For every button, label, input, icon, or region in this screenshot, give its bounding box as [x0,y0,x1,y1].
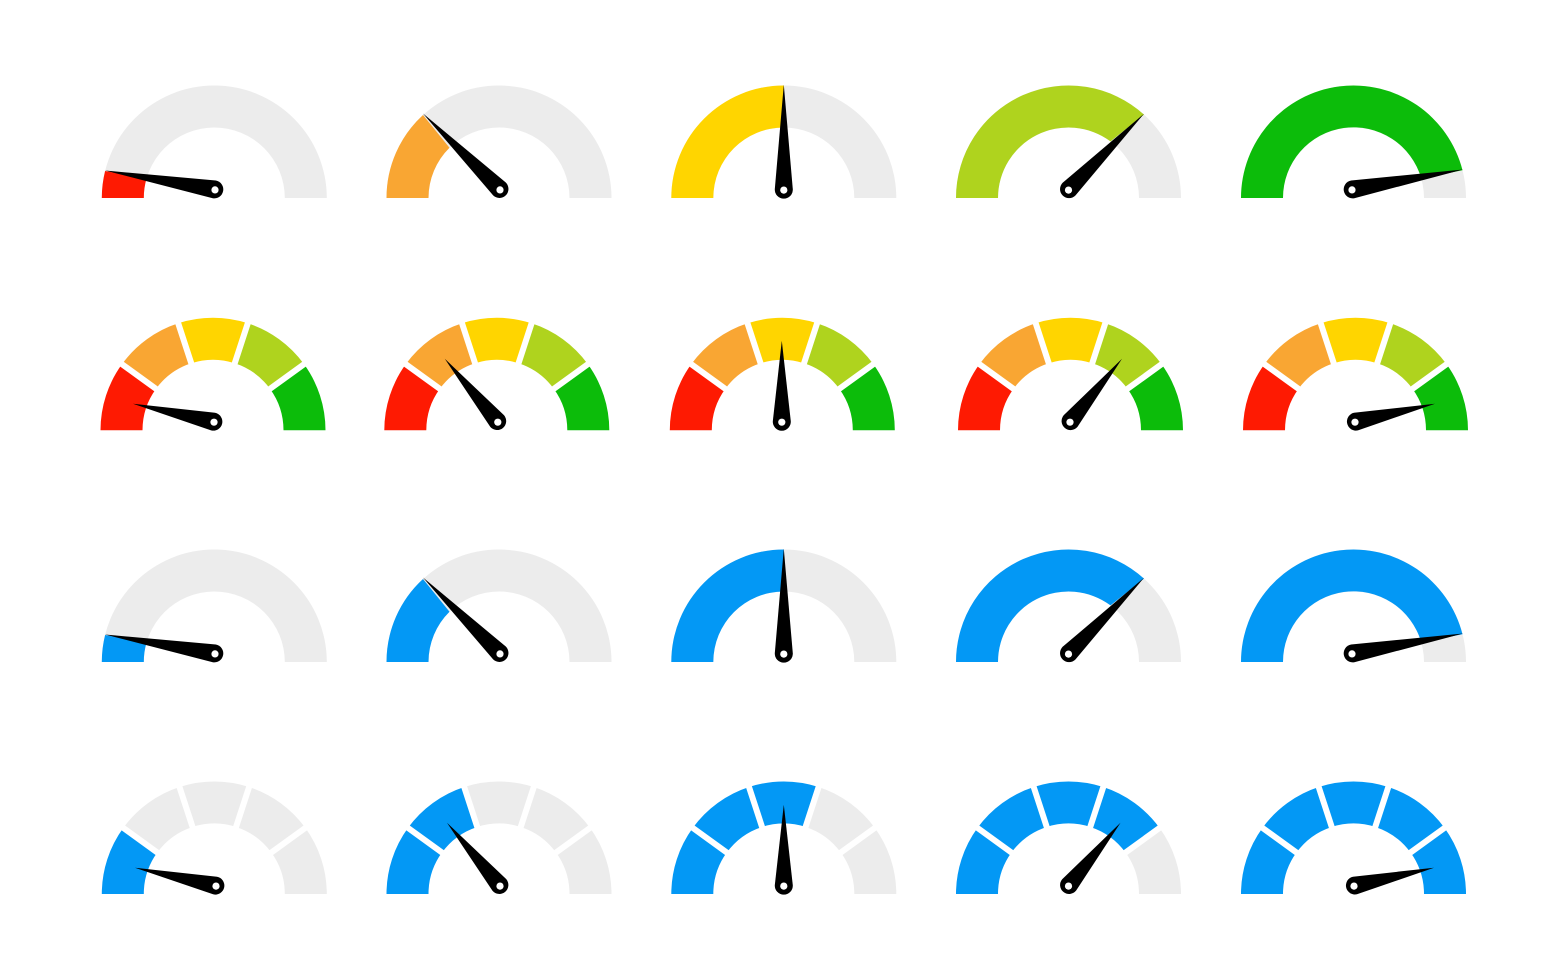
gauge: two blue segments [386,780,612,894]
gauge: red level [102,86,327,198]
gauge: needle on lime [958,316,1183,430]
gauge: blue level 5 [1241,550,1466,662]
row 3: solid blue gauges [102,549,1466,663]
row 1: solid colour gauges [102,85,1466,199]
row 4: five segment blue gauges [102,780,1466,895]
gauge: three blue segments [671,780,896,895]
gauge: blue level 1 [102,550,327,662]
gauge: blue level 4 [956,550,1181,662]
gauge: five blue segments [1241,780,1466,894]
gauge: needle on red [100,316,326,431]
gauge: orange level [386,86,612,198]
gauge: needle on orange [384,316,609,430]
gauge: four blue segments [956,780,1181,894]
gauge: needle on green [1243,316,1468,431]
gauge: green level [1241,86,1466,198]
gauge: yellow level [671,85,896,199]
gauge: needle on yellow [670,316,895,431]
gauge: blue level 3 [671,549,896,663]
row 2: five segment colour gauges [100,316,1468,431]
gauge: blue level 2 [386,550,612,662]
gauge: one blue segment [102,780,327,895]
gauge: lime level [956,86,1181,198]
